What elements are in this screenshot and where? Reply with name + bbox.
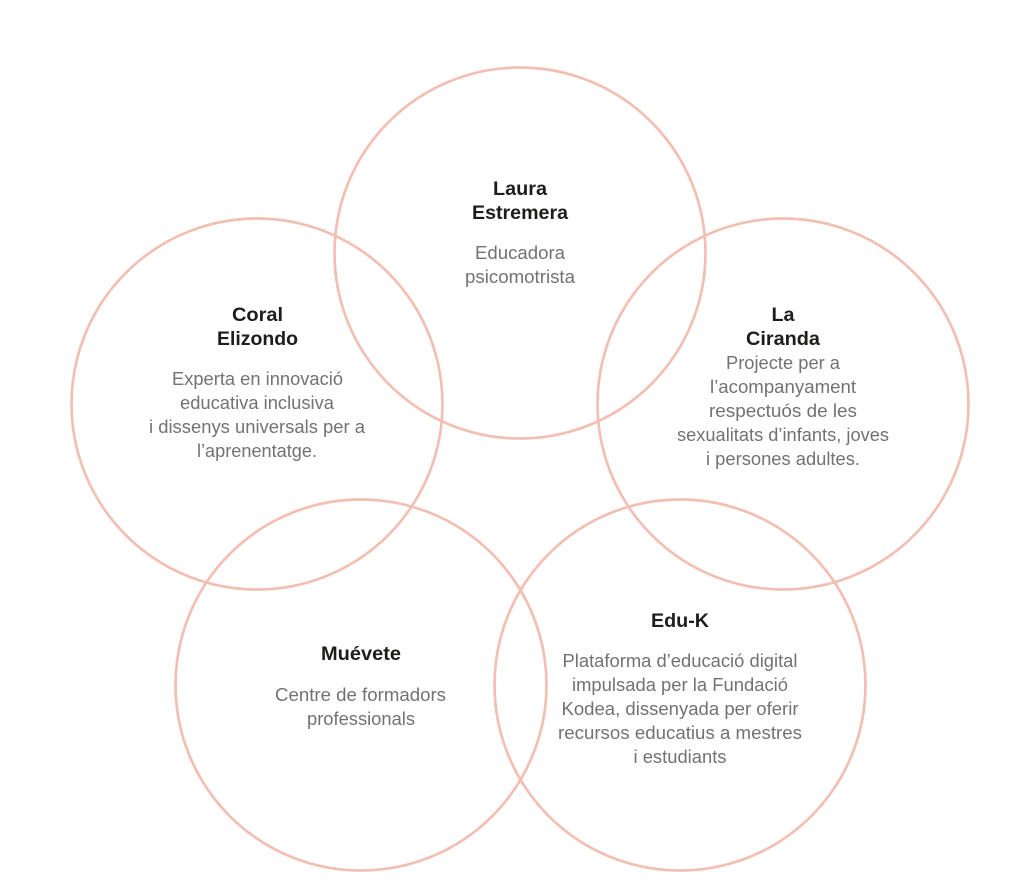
circle: Muévete bbox=[176, 500, 546, 870]
text block: Coral Elizondo: i dissenys universals per a bbox=[149, 416, 366, 437]
text block: Laura Estremera: psicomotrista bbox=[465, 266, 576, 287]
circle: Coral Elizondo bbox=[72, 218, 442, 590]
text block: La Ciranda bbox=[677, 305, 889, 469]
text block: La Ciranda: Ciranda bbox=[746, 329, 820, 350]
text block: Laura Estremera: Estremera bbox=[472, 203, 568, 224]
circle: Edu-K bbox=[494, 500, 866, 870]
text block: Edu-K: Plataforma d’educació digital bbox=[562, 650, 798, 671]
text block: Muévete bbox=[275, 644, 446, 729]
text block: La Ciranda: respectuós de les bbox=[709, 400, 857, 421]
text block: Edu-K: Kodea, dissenyada per oferir bbox=[562, 698, 798, 719]
text block: La Ciranda: Projecte per a bbox=[726, 352, 841, 373]
text block: Coral Elizondo: Experta en innovació bbox=[172, 368, 343, 389]
text block: Coral Elizondo: Elizondo bbox=[217, 329, 298, 350]
text block: Coral Elizondo bbox=[149, 305, 366, 461]
circle: La Ciranda bbox=[598, 218, 968, 590]
text block: Laura Estremera: Educadora bbox=[475, 242, 566, 263]
text block: Coral Elizondo: Coral bbox=[232, 305, 283, 326]
text block: Coral Elizondo: l’aprenentatge. bbox=[197, 440, 317, 461]
text block: Laura Estremera bbox=[465, 179, 576, 287]
circle: Laura Estremera bbox=[334, 68, 706, 438]
text block: Muévete: professionals bbox=[307, 708, 415, 729]
text block: Edu-K: Edu-K bbox=[651, 611, 709, 632]
text block: La Ciranda: sexualitats d’infants, joves bbox=[677, 424, 889, 445]
text block: La Ciranda: l’acompanyament bbox=[710, 376, 857, 397]
text block: La Ciranda: La bbox=[772, 305, 795, 326]
text block: La Ciranda: i persones adultes. bbox=[706, 448, 860, 469]
text block: Coral Elizondo: educativa inclusiva bbox=[180, 392, 335, 413]
text block: Edu-K: impulsada per la Fundació bbox=[572, 674, 788, 695]
text block: Muévete: Muévete bbox=[321, 644, 401, 665]
text block: Edu-K: recursos educatius a mestres bbox=[558, 722, 802, 743]
text block: Muévete: Centre de formadors bbox=[275, 684, 446, 705]
text block: Edu-K bbox=[558, 611, 802, 767]
text block: Laura Estremera: Laura bbox=[493, 179, 547, 200]
text block: Edu-K: i estudiants bbox=[634, 746, 726, 767]
